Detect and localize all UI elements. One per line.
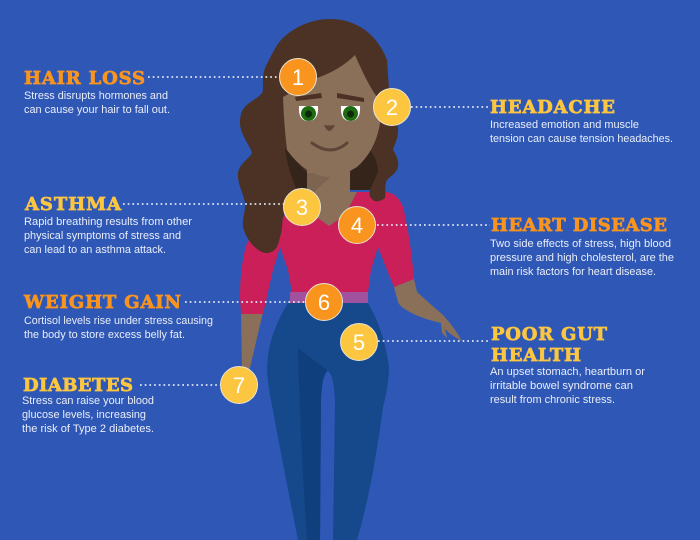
text block: poor gut health: result from chronic stress. xyxy=(490,394,615,406)
text block: headache: HEADACHE xyxy=(490,97,615,118)
hair back xyxy=(238,19,398,253)
text block: asthma: Rapid breathing results from other xyxy=(24,216,192,228)
text block: poor gut health xyxy=(490,324,645,406)
marker 6 xyxy=(306,284,342,320)
jeans shadow xyxy=(298,348,327,540)
text block: asthma: physical symptoms of stress and xyxy=(24,230,181,242)
text block: heart disease: HEART DISEASE xyxy=(491,215,667,236)
text block: headache xyxy=(490,97,673,145)
text block: poor gut health: POOR GUT xyxy=(491,324,608,345)
right eye xyxy=(341,106,360,121)
hair shadow xyxy=(285,148,378,192)
text block: diabetes: Stress can raise your blood xyxy=(22,395,154,407)
marker 2 xyxy=(374,88,410,126)
text block: headache: tension can cause tension headaches. xyxy=(490,133,673,145)
text block: poor gut health: HEALTH xyxy=(491,345,581,366)
text block: diabetes xyxy=(22,375,154,435)
text block: diabetes: DIABETES xyxy=(23,375,133,396)
text block: weight gain: the body to store excess belly fat. xyxy=(24,329,185,341)
text block: hair loss: can cause your hair to fall out. xyxy=(24,104,170,116)
left arm xyxy=(241,312,263,372)
text block: poor gut health: An upset stomach, heartburn or xyxy=(490,366,645,378)
marker 1: 1 xyxy=(292,65,304,90)
right arm xyxy=(394,279,462,341)
text block: weight gain: WEIGHT GAIN xyxy=(23,292,181,313)
marker 2: 2 xyxy=(386,95,398,120)
mouth xyxy=(312,143,347,150)
face xyxy=(283,55,381,177)
text block: poor gut health: irritable bowel syndrome can xyxy=(490,380,633,392)
text block: diabetes: the risk of Type 2 diabetes. xyxy=(22,423,154,435)
neck shade xyxy=(307,173,335,192)
text block: hair loss: Stress disrupts hormones and xyxy=(24,90,168,102)
text block: heart disease xyxy=(490,215,674,278)
nose xyxy=(324,125,335,131)
text block: hair loss: HAIR LOSS xyxy=(24,68,145,89)
marker 7 xyxy=(220,366,258,404)
marker 6: 6 xyxy=(318,290,330,315)
marker 3: 3 xyxy=(296,195,308,220)
figure: woman xyxy=(238,19,462,540)
shirt xyxy=(240,192,414,314)
text block: headache: Increased emotion and muscle xyxy=(490,119,639,131)
marker 5: 5 xyxy=(353,330,365,355)
text block: weight gain: Cortisol levels rise under stress causing xyxy=(24,315,213,327)
text block: heart disease: pressure and high cholesterol, are the xyxy=(490,252,674,264)
text block: asthma: can lead to an asthma attack. xyxy=(24,244,166,256)
marker 4 xyxy=(338,206,376,244)
marker 4: 4 xyxy=(351,213,363,238)
marker 7: 7 xyxy=(233,373,245,398)
belt xyxy=(290,292,368,303)
text block: heart disease: Two side effects of stress, high blood xyxy=(490,238,671,250)
text block: asthma: ASTHMA xyxy=(24,194,122,215)
text block: weight gain xyxy=(23,292,213,341)
text block: asthma xyxy=(24,194,192,256)
neck xyxy=(307,170,350,192)
marker 3 xyxy=(284,188,320,226)
marker 1 xyxy=(280,58,316,96)
connector lines xyxy=(123,77,490,385)
marker 5 xyxy=(340,324,378,360)
jeans xyxy=(267,303,389,540)
text block: hair loss xyxy=(24,68,170,116)
text block: diabetes: glucose levels, increasing xyxy=(22,409,146,421)
text block: heart disease: main risk factors for heart disease. xyxy=(490,266,656,278)
chest xyxy=(305,192,357,226)
left eye xyxy=(299,106,318,121)
eyebrows xyxy=(295,93,364,102)
